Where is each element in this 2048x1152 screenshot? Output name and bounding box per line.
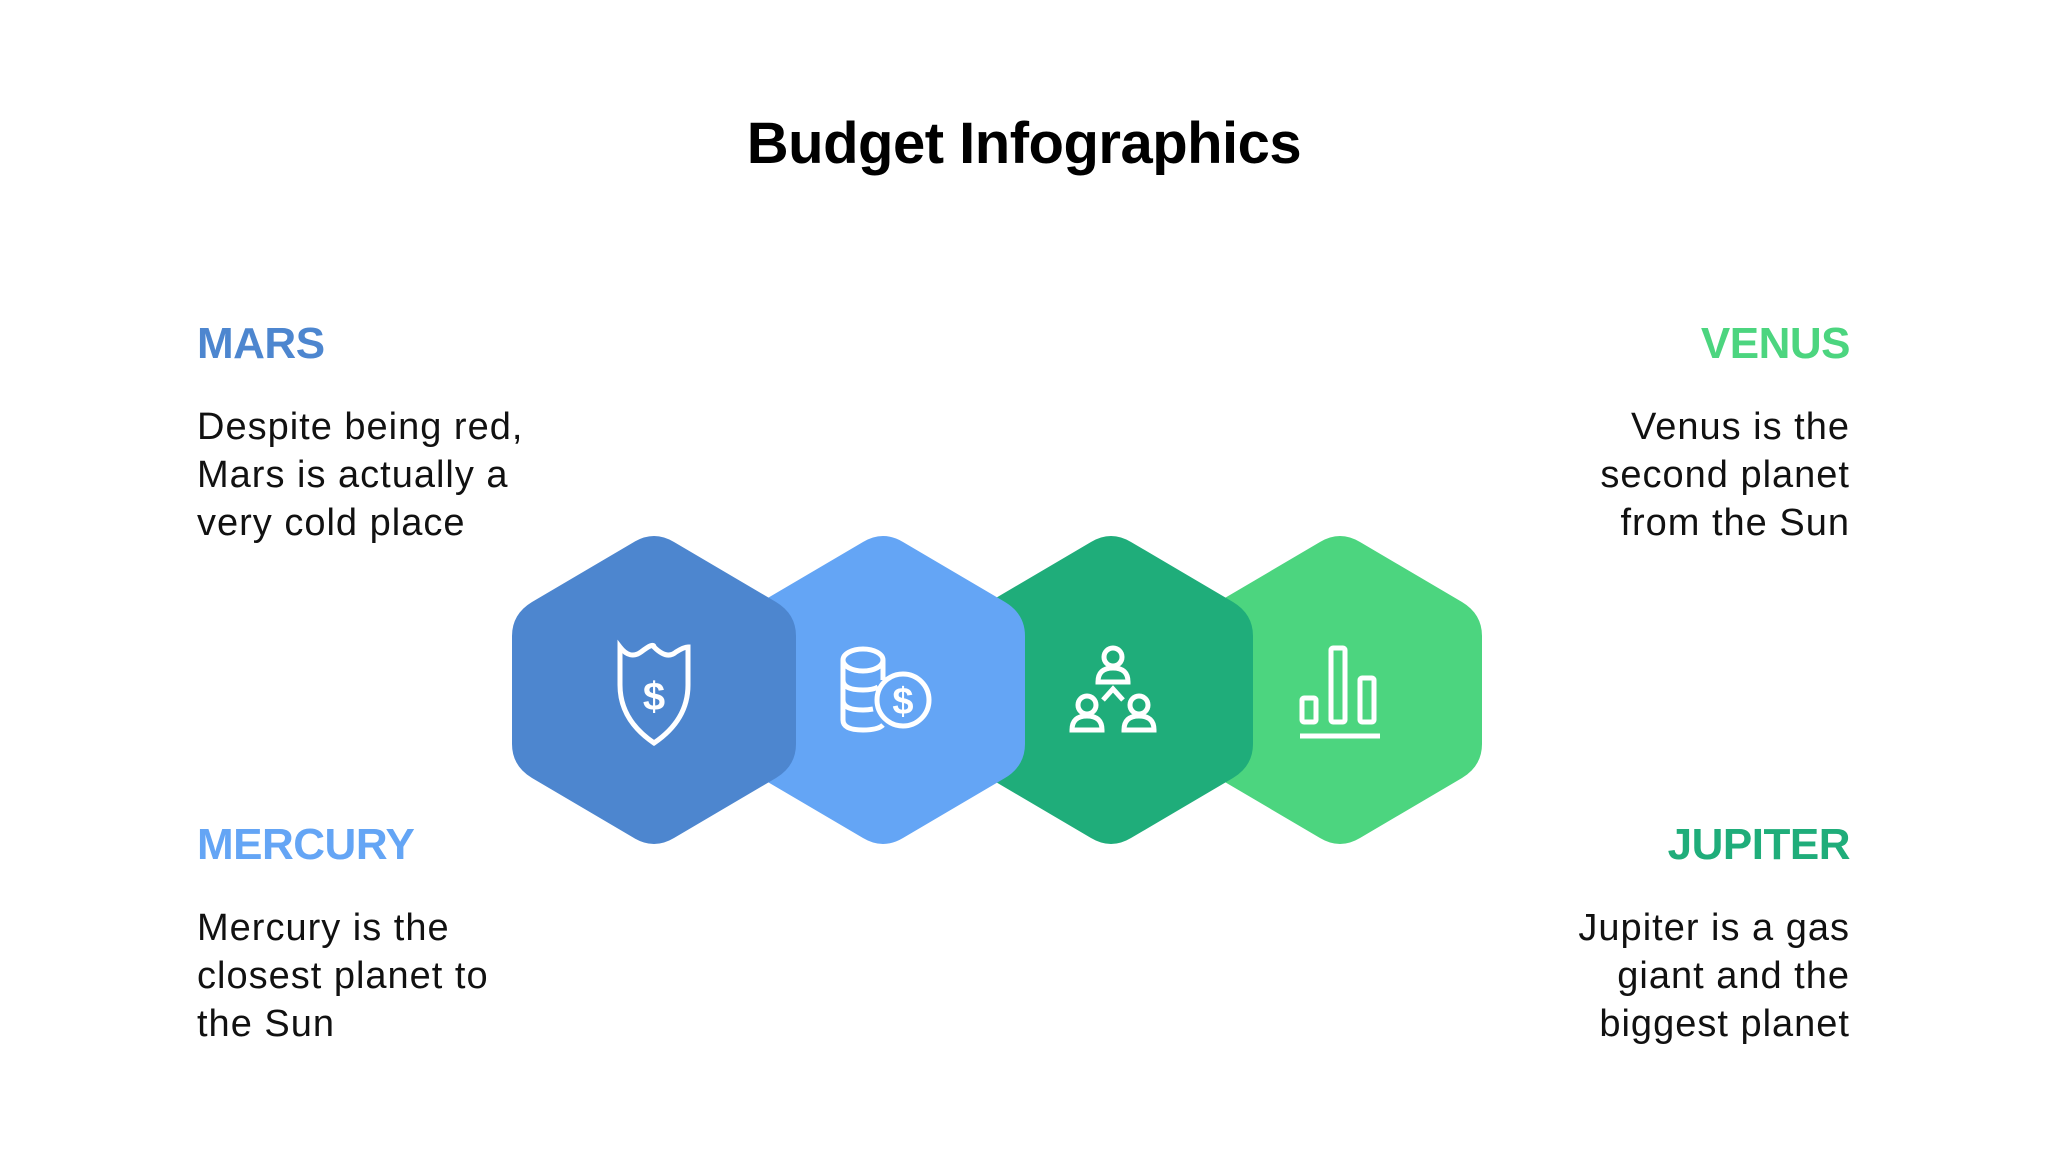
hexagon 4: chart [1198,536,1482,844]
text block: venus [1600,319,1850,544]
text block: mercury [197,820,489,1045]
text block: jupiter [1578,820,1850,1045]
text block: mars: Despite being red, [197,406,523,448]
text block: venus: VENUS [1701,319,1850,368]
text block: mars [197,319,523,544]
text block: mercury: MERCURY [197,820,414,869]
hexagon 2: coins [741,536,1025,844]
text block: mars: Mars is actually a [197,454,509,496]
text block: jupiter: biggest planet [1599,1003,1850,1045]
text block: mercury: closest planet to [197,955,489,997]
title: Budget Infographics [747,111,1301,176]
text block: venus: from the Sun [1620,502,1850,544]
text block: mercury: Mercury is the [197,907,450,949]
text block: mars: very cold place [197,502,465,544]
hexagon 2: coins: $ [892,681,914,723]
hexagon 1: shield: $ [643,675,665,719]
text block: mercury: the Sun [197,1003,335,1045]
text block: mars: MARS [197,319,325,368]
hexagon 1: shield [512,536,796,844]
text block: jupiter: JUPITER [1668,820,1850,869]
text block: jupiter: Jupiter is a gas [1578,907,1850,949]
text block: venus: second planet [1600,454,1850,496]
hexagon 3: people [969,536,1253,844]
text block: venus: Venus is the [1631,406,1850,448]
text block: jupiter: giant and the [1617,955,1850,997]
